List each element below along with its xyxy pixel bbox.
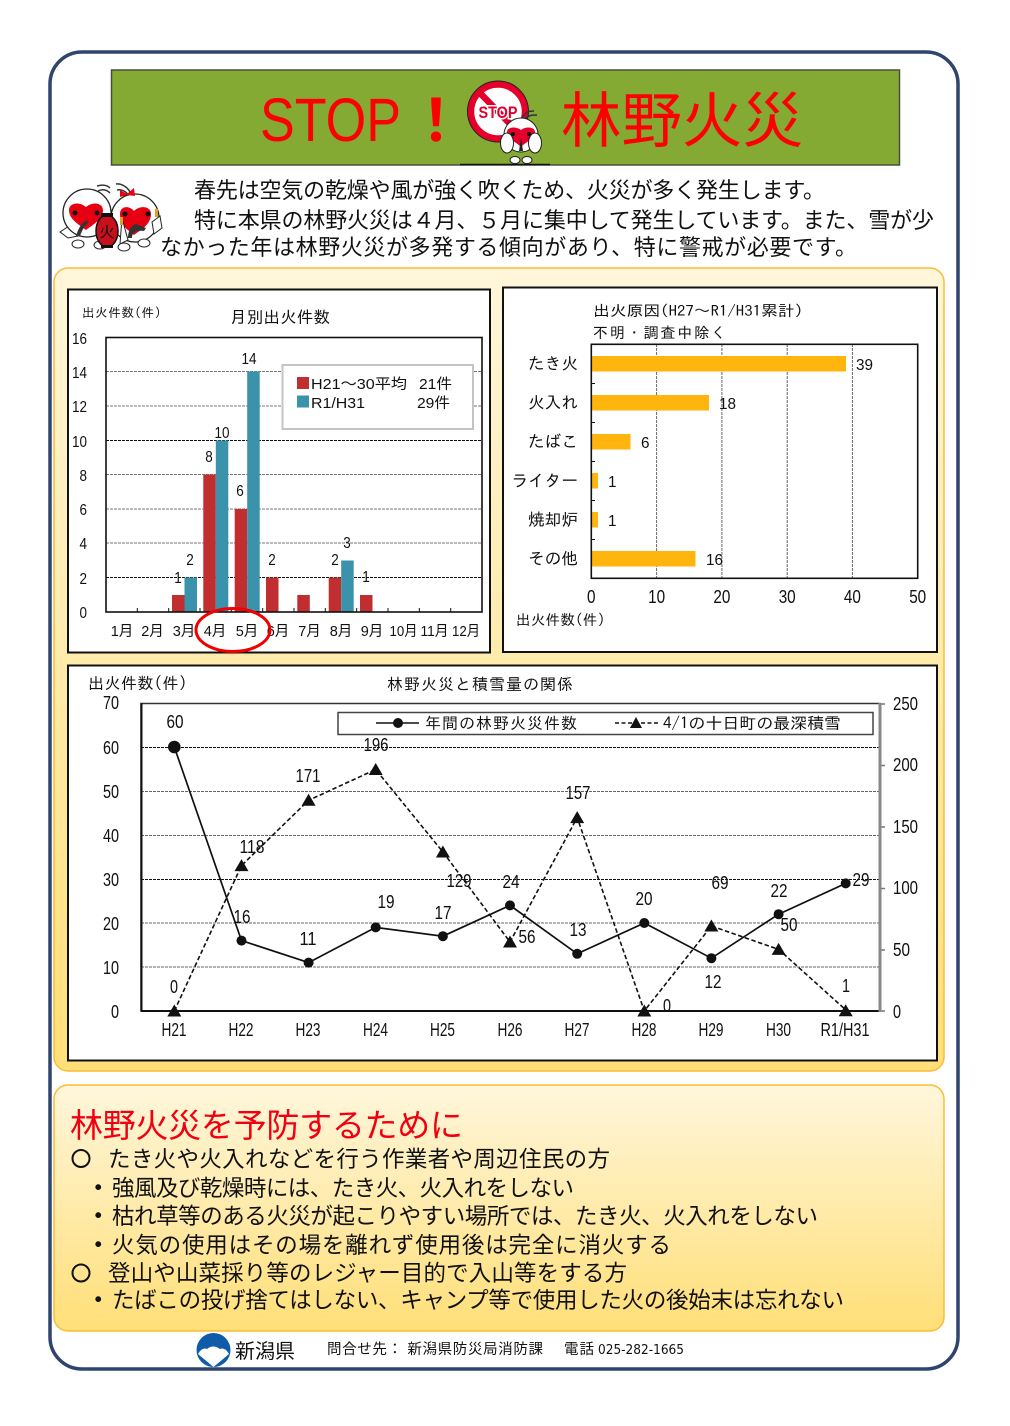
data labels: 1 <box>174 570 182 587</box>
left axis labels: 20 <box>103 914 119 934</box>
left axis labels: 50 <box>103 782 119 802</box>
icon: Niigata logo <box>196 1333 230 1367</box>
data labels: 0 <box>663 996 671 1016</box>
contact <box>327 1341 684 1358</box>
left axis labels: 0 <box>111 1002 119 1022</box>
prevention list: 登山や山菜採り等のレジャー目的で入山等をする方 <box>108 1261 627 1286</box>
icon: stop sign mascot: STOP <box>478 103 518 122</box>
prevention list: 火気の使用はその場を離れず使用後は完全に消火する <box>112 1233 671 1258</box>
left axis labels: 60 <box>103 738 119 758</box>
data labels: 2 <box>268 552 276 569</box>
highlight circle <box>196 608 270 652</box>
value labels: 1 <box>608 513 617 530</box>
month labels: 1月 <box>111 624 133 640</box>
intro text <box>160 178 934 260</box>
right axis labels <box>893 694 918 1022</box>
category labels: ライター <box>511 472 578 490</box>
prevention list: 枯れ草等のある火災が起こりやすい場所では、たき火、火入れをしない <box>112 1204 818 1229</box>
x axis labels: 30 <box>779 587 796 607</box>
line: snow depth <box>167 763 853 1016</box>
left axis labels: 10 <box>103 958 119 978</box>
prevention list <box>72 1147 844 1313</box>
chart: fire causes <box>503 288 937 652</box>
icon: two mascots with lantern <box>60 184 162 251</box>
title banner <box>112 70 900 165</box>
month labels: 10月 <box>390 624 418 640</box>
icon: two mascots with lantern: 火 <box>99 224 115 241</box>
right axis labels: 150 <box>893 817 918 837</box>
contact: 問合せ先： 新潟県防災局消防課 <box>327 1341 544 1358</box>
month labels: 5月 <box>236 624 258 640</box>
month labels: 12月 <box>452 624 480 640</box>
data labels: 12 <box>704 972 722 992</box>
contact: 電話 <box>564 1341 594 1358</box>
data labels: 60 <box>166 712 184 732</box>
x axis labels: H24 <box>363 1020 388 1040</box>
legend: 4/1の十日町の最深積雪 <box>663 715 841 731</box>
data labels: 13 <box>570 920 586 940</box>
x axis labels: H29 <box>698 1020 724 1040</box>
intro text: なかった年は林野火災が多発する傾向があり、特に警戒が必要です。 <box>160 235 857 260</box>
data labels: 22 <box>770 881 788 901</box>
intro text: 特に本県の林野火災は４月、５月に集中して発生しています。また、雪が少 <box>194 208 934 233</box>
x axis labels: H28 <box>632 1020 656 1040</box>
y axis labels: 12 <box>72 399 87 416</box>
x axis title: 出火件数(件) <box>516 612 605 627</box>
y axis labels: 6 <box>80 502 87 519</box>
data labels: 14 <box>242 351 257 368</box>
data labels: 0 <box>170 977 178 997</box>
category labels: 焼却炉 <box>528 512 578 528</box>
data labels: 56 <box>518 927 536 947</box>
icon: stop sign mascot <box>460 81 550 164</box>
category labels: 火入れ <box>528 394 578 412</box>
data labels: 1 <box>362 569 370 586</box>
data labels: 10 <box>214 425 230 442</box>
value labels: 18 <box>719 396 736 413</box>
data labels: 69 <box>712 873 728 893</box>
right axis labels: 0 <box>893 1002 901 1022</box>
right axis labels: 250 <box>893 694 918 714</box>
panel: charts <box>54 268 944 1071</box>
x axis labels: 10 <box>648 587 665 607</box>
chart heading <box>593 303 803 340</box>
x axis labels: 0 <box>587 587 596 607</box>
left axis labels: 40 <box>103 826 119 846</box>
y axis labels: 2 <box>80 571 87 588</box>
data labels <box>166 712 870 1016</box>
data labels: 196 <box>364 735 388 755</box>
x axis labels: H21 <box>162 1020 186 1040</box>
month labels: 9月 <box>361 624 383 640</box>
chart unit label: 出火件数(件) <box>82 306 161 319</box>
value labels: 16 <box>706 552 723 569</box>
title: exclamation: ！ <box>407 74 465 158</box>
chart: fires vs snow <box>68 666 937 1060</box>
category labels: たき火 <box>528 356 578 372</box>
data labels: 2 <box>331 552 339 569</box>
category labels <box>511 356 578 568</box>
data labels: 6 <box>236 483 244 500</box>
legend <box>338 712 873 734</box>
x axis labels: H23 <box>296 1020 320 1040</box>
data labels: 1 <box>842 976 850 996</box>
value labels <box>608 357 873 569</box>
prefecture name: 新潟県 <box>235 1340 295 1363</box>
x axis labels: 40 <box>844 587 861 607</box>
month labels: 7月 <box>298 624 321 640</box>
x axis labels <box>587 587 926 607</box>
y axis labels: 10 <box>72 434 87 451</box>
x axis labels: H22 <box>228 1020 254 1040</box>
chart heading: 不明・調査中除く <box>593 325 726 340</box>
data labels: 118 <box>240 837 264 857</box>
chart: monthly fires <box>68 290 490 652</box>
data labels: 11 <box>300 929 316 949</box>
y axis title: 出火件数(件) <box>88 675 187 691</box>
month labels <box>111 624 480 640</box>
month labels: 6月 <box>267 624 289 640</box>
legend: 21件 <box>419 376 452 393</box>
month labels: 3月 <box>173 624 195 640</box>
prevention list: たき火や火入れなどを行う作業者や周辺住民の方 <box>108 1147 610 1172</box>
data labels: 129 <box>446 871 472 891</box>
data labels: 50 <box>780 915 798 935</box>
x axis labels: H26 <box>498 1020 522 1040</box>
prevention list: ・ <box>87 1288 110 1313</box>
y axis labels: 4 <box>80 536 87 553</box>
legend: 年間の林野火災件数 <box>425 715 577 731</box>
x axis labels <box>162 1020 870 1040</box>
title: STOP: STOP <box>260 86 401 154</box>
x axis labels: 50 <box>909 587 926 607</box>
prevention list: ・ <box>87 1233 110 1258</box>
data labels: 20 <box>636 889 652 909</box>
prevention heading: 林野火災を予防するために <box>70 1107 463 1144</box>
data labels: 2 <box>186 552 194 569</box>
data labels: 19 <box>378 892 394 912</box>
category labels: たばこ <box>528 432 578 450</box>
month labels: 11月 <box>420 624 448 640</box>
value labels: 39 <box>856 357 873 374</box>
legend: H21～30平均 <box>311 376 407 393</box>
data labels: 16 <box>234 907 250 927</box>
y axis labels: 0 <box>80 605 87 622</box>
month labels: 2月 <box>141 624 164 640</box>
y axis labels: 14 <box>72 365 87 382</box>
prevention list: たばこの投げ捨てはしない、キャンプ等で使用した火の後始末は忘れない <box>112 1288 844 1313</box>
month labels: 4月 <box>204 624 226 640</box>
y axis labels: 8 <box>80 468 87 485</box>
legend: R1/H31 <box>311 396 365 412</box>
data labels: 24 <box>502 872 520 892</box>
title: forest fire: 林野火災 <box>561 73 803 160</box>
right axis labels: 100 <box>893 878 918 898</box>
prevention list: ・ <box>87 1176 110 1201</box>
data labels: 3 <box>343 535 351 552</box>
prevention list: 強風及び乾燥時には、たき火、火入れをしない <box>112 1176 574 1201</box>
intro text: 春先は空気の乾燥や風が強く吹くため、火災が多く発生します。 <box>194 178 825 203</box>
x axis labels: H27 <box>564 1020 590 1040</box>
legend: 29件 <box>417 395 450 412</box>
left axis labels: 30 <box>103 870 119 890</box>
left axis labels: 70 <box>103 693 119 713</box>
y axis labels <box>72 331 87 622</box>
data labels: 17 <box>434 903 452 923</box>
bars <box>592 356 846 566</box>
right axis labels: 50 <box>893 940 910 960</box>
month labels: 8月 <box>330 624 352 640</box>
data labels: 29 <box>852 870 870 890</box>
footer <box>196 1333 684 1367</box>
contact: 025-282-1665 <box>598 1343 684 1358</box>
x axis labels: H25 <box>430 1020 455 1040</box>
x axis labels: R1/H31 <box>820 1020 870 1040</box>
line: annual fires <box>168 741 851 968</box>
panel: prevention <box>54 1085 944 1331</box>
data labels: 171 <box>296 766 320 786</box>
x axis labels: 20 <box>713 587 730 607</box>
prevention list: ・ <box>87 1204 110 1229</box>
data labels: 157 <box>566 783 590 803</box>
data labels: 8 <box>205 449 213 466</box>
chart heading: 林野火災と積雪量の関係 <box>387 676 573 692</box>
chart heading: 月別出火件数 <box>230 308 330 325</box>
y axis labels: 16 <box>72 331 87 348</box>
value labels: 1 <box>608 474 617 491</box>
chart heading: 出火原因(H27～R1/H31累計) <box>593 303 803 318</box>
right axis labels: 200 <box>893 755 918 775</box>
legend <box>282 365 473 429</box>
x axis labels: H30 <box>766 1020 791 1040</box>
bars <box>172 372 372 612</box>
category labels: その他 <box>528 550 578 568</box>
value labels: 6 <box>641 435 650 452</box>
data labels <box>174 351 370 587</box>
left axis labels <box>103 693 119 1022</box>
